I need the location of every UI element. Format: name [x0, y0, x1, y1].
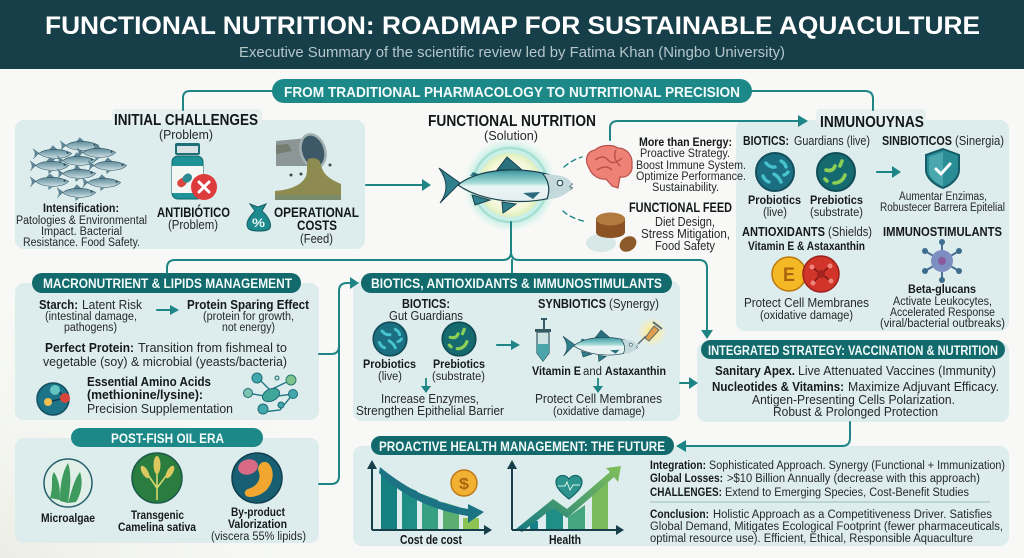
- sinbioticos heading: [882, 133, 1004, 148]
- labels: post-fish sources: (viscera 55% lipids): [211, 531, 306, 543]
- text: starch: pathogens): [64, 322, 117, 334]
- heading: functional nutrition: FUNCTIONAL NUTRITION: [428, 113, 596, 130]
- text: beta-glucans: Activate Leukocytes,: [893, 296, 992, 308]
- pill heading: BIOTICS, ANTIOXIDANTS & IMMUNOSTIMULANTS: [371, 276, 662, 291]
- text: biotics: Gut Guardians: [389, 309, 463, 323]
- text: protect membranes: (oxidative damage): [553, 406, 645, 418]
- text: vitamin e and astaxanthin: and: [583, 366, 602, 378]
- text: more than energy: Boost Immune System.: [636, 160, 746, 172]
- text: perfect protein: [43, 340, 287, 369]
- top banner pill: FROM TRADITIONAL PHARMACOLOGY TO NUTRITIONAL PRECISION: [284, 84, 740, 101]
- label: Cost de cost: [400, 533, 463, 547]
- text: more than energy: Proactive Strategy.: [640, 148, 730, 160]
- text: starch: [39, 297, 142, 334]
- labels: post-fish sources: Camelina sativa: [118, 522, 197, 534]
- text: enzymes: Robustecer Barrera Epitelial: [880, 202, 1005, 214]
- text: amino acids: (methionine/lysine):: [87, 387, 203, 402]
- text: beta-glucans: [880, 284, 1005, 330]
- text: beta-glucans: Accelerated Response: [890, 307, 995, 319]
- icon: injection: [637, 317, 667, 347]
- functional nutrition centre: [428, 113, 596, 232]
- text: perfect protein: Perfect Protein:: [45, 340, 134, 355]
- title: FUNCTIONAL NUTRITION: ROADMAP FOR SUSTAINABLE AQUACULTURE: [45, 12, 980, 40]
- labels: probiotics and prebiotics: (substrate): [810, 207, 863, 219]
- text: synbiotics: [538, 296, 659, 311]
- text: enzymes: Increase Enzymes,: [381, 392, 479, 406]
- text: intensification: Intensification:: [43, 203, 119, 215]
- panel: integrated strategy: [697, 340, 1009, 422]
- labels: probiotics and prebiotics: Probiotics: [748, 195, 801, 207]
- text: perfect protein: vegetable (soy) & microbial (yeasts/bacteria): [43, 354, 287, 369]
- icon: probiotics: [373, 322, 407, 356]
- labels: probiotics and prebiotics: (live): [763, 207, 787, 219]
- text: conclusion: Conclusion:: [650, 509, 709, 521]
- icon: antibiotic bottle: [172, 143, 217, 200]
- text: strategy: Robust & Prolonged Protection: [773, 404, 938, 419]
- panel: biotics, antioxidants, immunostimulants: [353, 273, 680, 421]
- text: more than energy: More than Energy:: [639, 137, 732, 149]
- text: enzymes: [356, 392, 504, 418]
- icon: feed pellets: [586, 212, 639, 255]
- text: starch: Starch:: [39, 297, 78, 312]
- text: more than energy: [636, 137, 746, 194]
- icon: vitamin e: E: [783, 265, 795, 286]
- text: protein sparing: Protein Sparing Effect: [187, 297, 310, 312]
- text: strategy: Sanitary Apex.: [715, 363, 795, 378]
- text: starch: (intestinal damage,: [45, 311, 137, 323]
- text: biotics: BIOTICS:: [402, 296, 450, 311]
- text: beta-glucans: (viral/bacterial outbreaks): [880, 318, 1005, 330]
- text: conclusion: Global Demand, Mitigates Ecological Footprint (fewer pharmaceuticals,: [650, 521, 1003, 533]
- labels: (live): [378, 371, 402, 383]
- text: starch: Latent Risk: [82, 297, 142, 312]
- text: protect membranes: [744, 295, 869, 322]
- text: protect membranes: (oxidative damage): [760, 310, 853, 322]
- panel: macronutrient and lipids: [15, 273, 319, 420]
- text: integration, losses, challenges: [650, 460, 1005, 499]
- biotics heading: Guardians (live): [794, 134, 870, 148]
- text: amino acids: Essential Amino Acids: [87, 374, 211, 389]
- sinbioticos heading: (Sinergia): [955, 134, 1004, 148]
- antioxidants heading: ANTIOXIDANTS: [742, 224, 825, 239]
- icon: salmon: [439, 157, 572, 213]
- text: operational costs: [274, 205, 359, 246]
- text: strategy: Maximize Adjuvant Efficacy.: [848, 379, 999, 394]
- text: beta-glucans: Beta-glucans: [908, 284, 976, 296]
- pill heading: PROACTIVE HEALTH MANAGEMENT: THE FUTURE: [379, 439, 665, 454]
- text: integration, losses, challenges: Integration:: [650, 460, 706, 472]
- icon: shield: [926, 149, 959, 188]
- heading: initial challenges: INITIAL CHALLENGES: [114, 112, 258, 129]
- icon: money bag: %: [252, 216, 265, 230]
- text: more than energy: Sustainability.: [652, 182, 719, 194]
- text: conclusion: Holistic Approach as a Competitiveness Driver. Satisfies: [713, 509, 992, 521]
- labels: Prebiotics: [433, 359, 485, 371]
- labels: post-fish sources: Transgenic: [131, 510, 185, 522]
- text: integration, losses, challenges: Global Losses:: [650, 473, 723, 485]
- text: functional feed: Food Safety: [655, 238, 715, 253]
- text: intensification: [16, 203, 147, 249]
- biotics heading: BIOTICS:: [743, 133, 789, 148]
- labels: (substrate): [432, 371, 485, 383]
- text: intensification: Patologies & Environmental: [16, 215, 147, 227]
- text: operational costs: COSTS: [297, 218, 337, 233]
- icon: prebiotics: [817, 153, 855, 191]
- text: antibiotico: ANTIBIÓTICO: [157, 205, 230, 220]
- text: biotics: [389, 296, 463, 323]
- text: intensification: Resistance. Food Safety.: [23, 237, 140, 249]
- panel: inmunouynas: [736, 109, 1009, 331]
- arrow: [877, 166, 901, 178]
- panel: initial challenges: [15, 109, 365, 249]
- antioxidants heading: [742, 224, 872, 253]
- text: functional feed: Stress Mitigation,: [641, 226, 730, 241]
- text: perfect protein: Transition from fishmeal to: [138, 340, 287, 355]
- icon: amino acids: [37, 383, 70, 415]
- text: strategy: [712, 363, 999, 419]
- icon: microalgae: [44, 459, 92, 507]
- icon: syringe: [535, 319, 551, 361]
- text: functional feed: Diet Design,: [655, 214, 715, 229]
- text: strategy: Nucleotides & Vitamins:: [712, 379, 844, 394]
- pill heading: MACRONUTRIENT & LIPIDS MANAGEMENT: [43, 276, 293, 291]
- icon: probiotics: [756, 153, 794, 191]
- pill heading: [32, 273, 301, 293]
- text: functional feed: [629, 200, 732, 253]
- icon: money bag: [247, 204, 271, 231]
- icon: fish school: [30, 138, 127, 201]
- text: protect membranes: Protect Cell Membranes: [535, 391, 662, 406]
- icon: molecules: [244, 373, 298, 414]
- antioxidants heading: (Shields): [828, 225, 872, 239]
- chart: health: [507, 460, 624, 547]
- icon: beta-glucan molecule: [922, 239, 962, 283]
- text: strategy: Antigen-Presenting Cells Polarization.: [752, 392, 955, 407]
- icon: coin: $: [459, 476, 469, 493]
- text: protect membranes: [535, 391, 662, 418]
- icon: waste pipe: [275, 131, 341, 200]
- text: operational costs: OPERATIONAL: [274, 205, 359, 220]
- text: vitamin e and astaxanthin: Astaxanthin: [605, 366, 666, 378]
- labels: post-fish sources: Valorization: [228, 519, 287, 531]
- top banner pill: [272, 79, 752, 103]
- label: Health: [549, 533, 581, 547]
- text: integration, losses, challenges: Sophisticated Approach. Synergy (Functional + Immunization): [709, 460, 1005, 472]
- icon: camelina: [132, 453, 182, 503]
- text: operational costs: (Feed): [300, 231, 333, 246]
- labels: Probiotics: [363, 359, 416, 371]
- text: integration, losses, challenges: Extend to Emerging Species, Cost-Benefit Studies: [725, 487, 969, 499]
- labels: [363, 359, 485, 383]
- panel: post-fish oil era: [15, 428, 319, 543]
- antioxidants heading: Vitamin E & Astaxanthin: [748, 241, 865, 253]
- arrow: [421, 378, 431, 393]
- connectors: [167, 91, 873, 484]
- icon: fish: [563, 330, 637, 361]
- text: integration, losses, challenges: CHALLENGES:: [650, 487, 722, 499]
- text: enzymes: Aumentar Enzimas,: [899, 191, 987, 203]
- text: enzymes: Strengthen Epithelial Barrier: [356, 404, 504, 418]
- pill heading: [361, 273, 672, 293]
- text: strategy: Live Attenuated Vaccines (Immunity): [798, 363, 996, 378]
- text: enzymes: [880, 191, 1005, 214]
- icon: heart: [556, 475, 582, 499]
- labels: post-fish sources: Microalgae: [41, 513, 95, 525]
- subheading: (Problem): [159, 127, 213, 142]
- icon: astaxanthin: [803, 256, 839, 292]
- labels: post-fish sources: [41, 507, 306, 543]
- text: conclusion: [650, 509, 1003, 545]
- text: synbiotics: (Synergy): [609, 297, 659, 311]
- text: protein sparing: not energy): [222, 322, 275, 334]
- text: protect membranes: Protect Cell Membranes: [744, 295, 869, 310]
- text: amino acids: Precision Supplementation: [87, 401, 233, 416]
- panel: proactive health management: [353, 436, 1009, 547]
- text: conclusion: optimal resource use). Efficient, Ethical, Responsible Aquaculture: [650, 533, 973, 545]
- biotics heading: [743, 133, 870, 148]
- text: protein sparing: [187, 297, 310, 334]
- icon: brain: [587, 146, 632, 188]
- text: antibiotico: [157, 205, 230, 232]
- labels: probiotics and prebiotics: [748, 195, 863, 219]
- sinbioticos heading: SINBIOTICOS: [882, 133, 952, 148]
- text: functional feed: FUNCTIONAL FEED: [629, 200, 732, 215]
- arrow: [157, 305, 179, 315]
- text: integration, losses, challenges: >$10 Billion Annually (decrease with this approach): [727, 473, 980, 485]
- labels: probiotics and prebiotics: Prebiotics: [810, 195, 863, 207]
- heading: INMUNOUYNAS: [820, 114, 924, 131]
- pill heading: [71, 428, 263, 447]
- text: antibiotico: (Problem): [168, 217, 218, 232]
- arrow: [497, 340, 520, 350]
- text: protein sparing: (protein for growth,: [203, 311, 294, 323]
- text: vitamin e and astaxanthin: [532, 366, 666, 378]
- subtitle: Executive Summary of the scientific review led by Fatima Khan (Ningbo University): [239, 44, 785, 61]
- text: synbiotics: SYNBIOTICS: [538, 296, 606, 311]
- icon: halo: [463, 138, 557, 232]
- icon: by-product: [232, 453, 282, 503]
- text: vitamin e and astaxanthin: Vitamin E: [532, 366, 581, 378]
- text: more than energy: Optimize Performance.: [636, 171, 746, 183]
- labels: post-fish sources: By-product: [231, 507, 285, 519]
- text: amino acids: [87, 374, 233, 416]
- immunostimulants heading: IMMUNOSTIMULANTS: [883, 224, 1002, 239]
- pill heading: POST-FISH OIL ERA: [111, 431, 224, 446]
- chart: cost: [367, 460, 492, 547]
- subheading: (Solution): [484, 128, 538, 143]
- icon: vitamin e: [772, 257, 806, 291]
- arrow: [593, 378, 603, 393]
- text: intensification: Impact. Bacterial: [41, 226, 122, 238]
- icon: prebiotics: [442, 322, 476, 356]
- header banner: [0, 0, 1024, 69]
